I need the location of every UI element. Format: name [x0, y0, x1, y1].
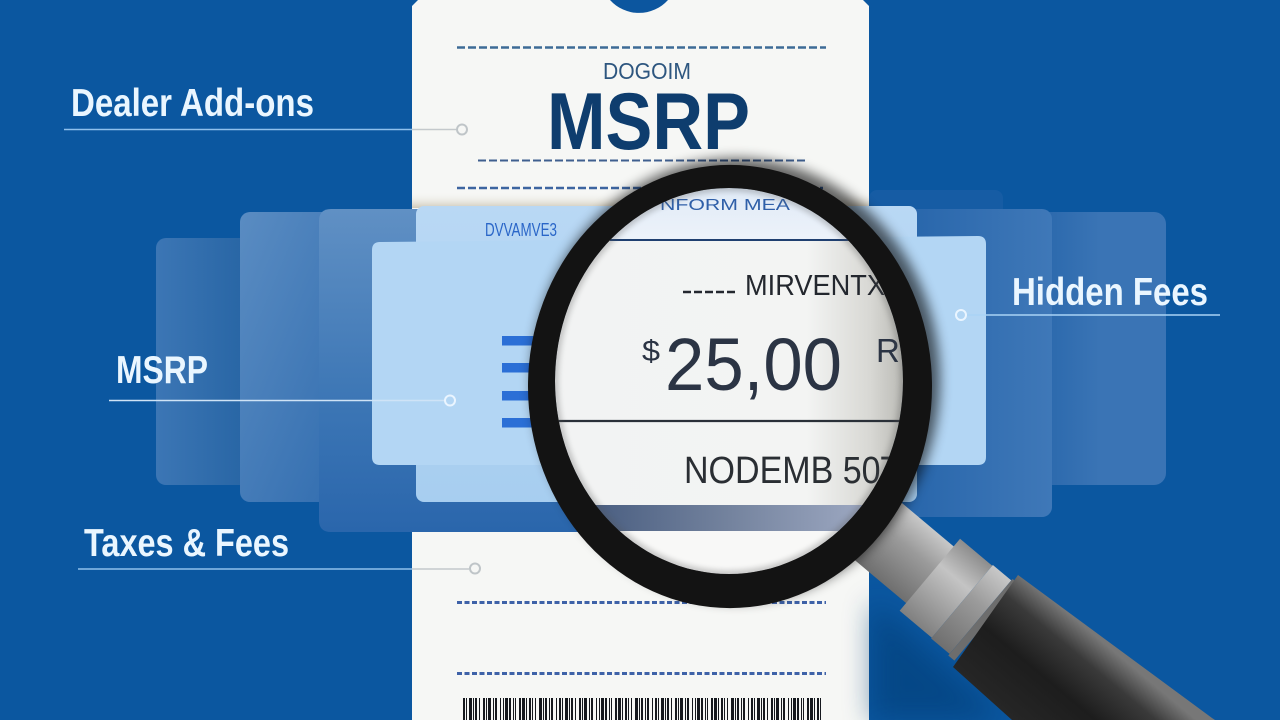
- price tag: [412, 0, 869, 720]
- lens background: [606, 188, 852, 245]
- faint top card: [869, 190, 1003, 250]
- handle: [823, 473, 1215, 720]
- front card: [372, 236, 986, 465]
- outer right card: [1000, 212, 1166, 485]
- callout: hidden fees: [956, 271, 1220, 320]
- back card label: DVVAMVE3: [485, 220, 557, 240]
- lens heading: MIRVENTX: [745, 270, 885, 302]
- price: 25,00: [665, 323, 842, 406]
- lens lower label: NODEMB 50TS: [684, 450, 924, 492]
- tag dashed rule middle: [478, 160, 808, 162]
- tag MSRP heading: MSRP: [547, 77, 750, 167]
- tag dashed rule top: [457, 46, 826, 49]
- callout: dealer add-ons: [64, 82, 467, 134]
- tag dashed rule bottom one: [457, 601, 826, 604]
- tag hole: [610, 0, 668, 13]
- callout: taxes and fees: Taxes & Fees: [84, 522, 289, 565]
- callout: hidden fees: Hidden Fees: [1012, 271, 1208, 314]
- handle shadow: [872, 600, 1005, 720]
- callout: MSRP: [109, 349, 455, 406]
- tag small heading: DOGOIM: [603, 58, 691, 84]
- magnifying glass: [528, 158, 1215, 720]
- price: RE: [876, 332, 922, 369]
- outer left card: [156, 238, 276, 485]
- magnified band: [596, 505, 862, 531]
- second left card: [240, 212, 360, 502]
- lens upper label: NFORM MEA: [660, 197, 790, 214]
- card line icon: [502, 336, 542, 428]
- tag dashed rule lower: [457, 187, 823, 189]
- shadow above cards: [412, 192, 869, 208]
- light back card: [416, 206, 917, 502]
- barcode: [463, 698, 822, 720]
- price: [642, 338, 898, 400]
- callout: MSRP: MSRP: [116, 349, 208, 392]
- callout: taxes and fees: [78, 522, 480, 574]
- stacked cards left and right: [156, 190, 1166, 532]
- tag dashed rule bottom two: [457, 672, 826, 675]
- second right card: [850, 209, 1052, 517]
- third left card: [319, 209, 869, 532]
- ring shadow: [532, 158, 940, 602]
- price: $: [642, 335, 660, 368]
- ring: [528, 165, 932, 608]
- lens content: [555, 185, 924, 580]
- lens edge shading: [555, 188, 903, 574]
- callout: dealer add-ons: Dealer Add-ons: [71, 82, 314, 125]
